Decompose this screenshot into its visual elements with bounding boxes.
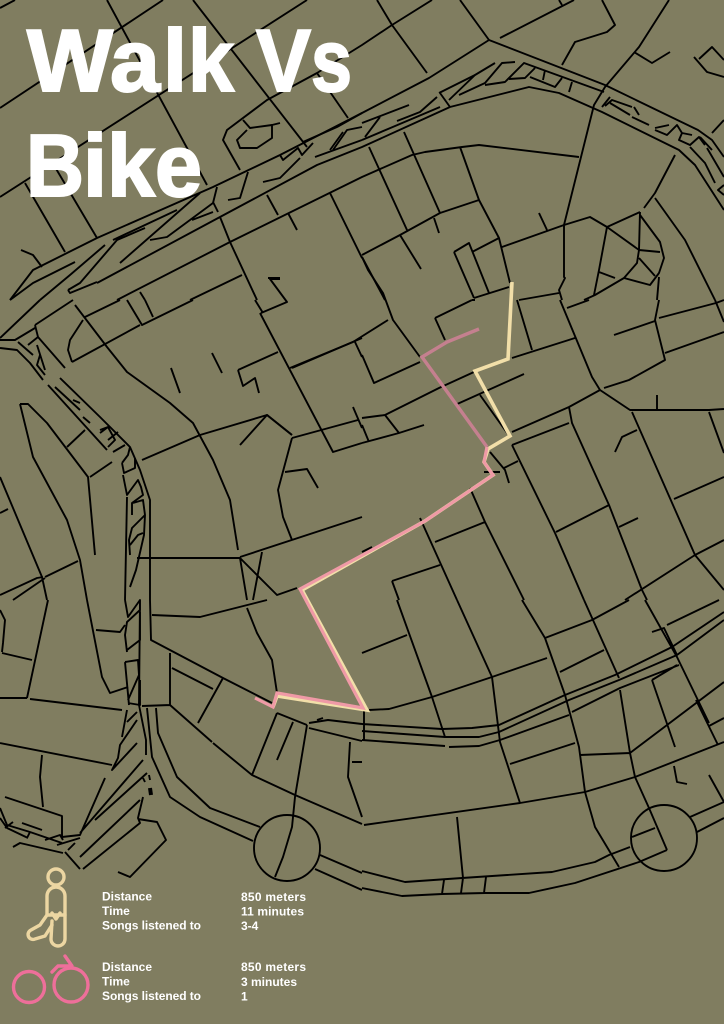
bike stats: Time [102,974,130,988]
walk stats: 11 minutes [241,904,304,918]
title: B [26,116,84,215]
bike stats: 850 meters [241,960,306,974]
walk stats: Distance [102,890,152,904]
walk stats [102,890,306,933]
roundabout: east [631,805,697,871]
title: V [256,11,311,110]
cycling route: upper [422,329,487,447]
walk stats: 3-4 [241,919,259,933]
title: i [83,116,107,215]
icon: bicycle [14,956,88,1002]
title: l [163,11,187,110]
bike stats: 3 minutes [241,975,297,989]
title: k [107,116,156,215]
icon: walking figure [28,869,65,946]
walk stats: Songs listened to [102,918,201,932]
bike stats: Distance [102,960,152,974]
walking route [273,282,512,710]
walk stats: 850 meters [241,890,306,904]
walk stats: Time [102,904,130,918]
title: k [188,11,235,110]
cycling route: lower [255,447,493,708]
title: s [311,11,352,110]
title [26,11,352,215]
title: e [155,116,202,215]
roundabout: west [254,815,320,881]
bike stats [102,960,306,1004]
bike stats: 1 [241,990,248,1004]
title: a [110,11,161,110]
bike stats: Songs listened to [102,989,201,1003]
title: W [27,11,113,110]
